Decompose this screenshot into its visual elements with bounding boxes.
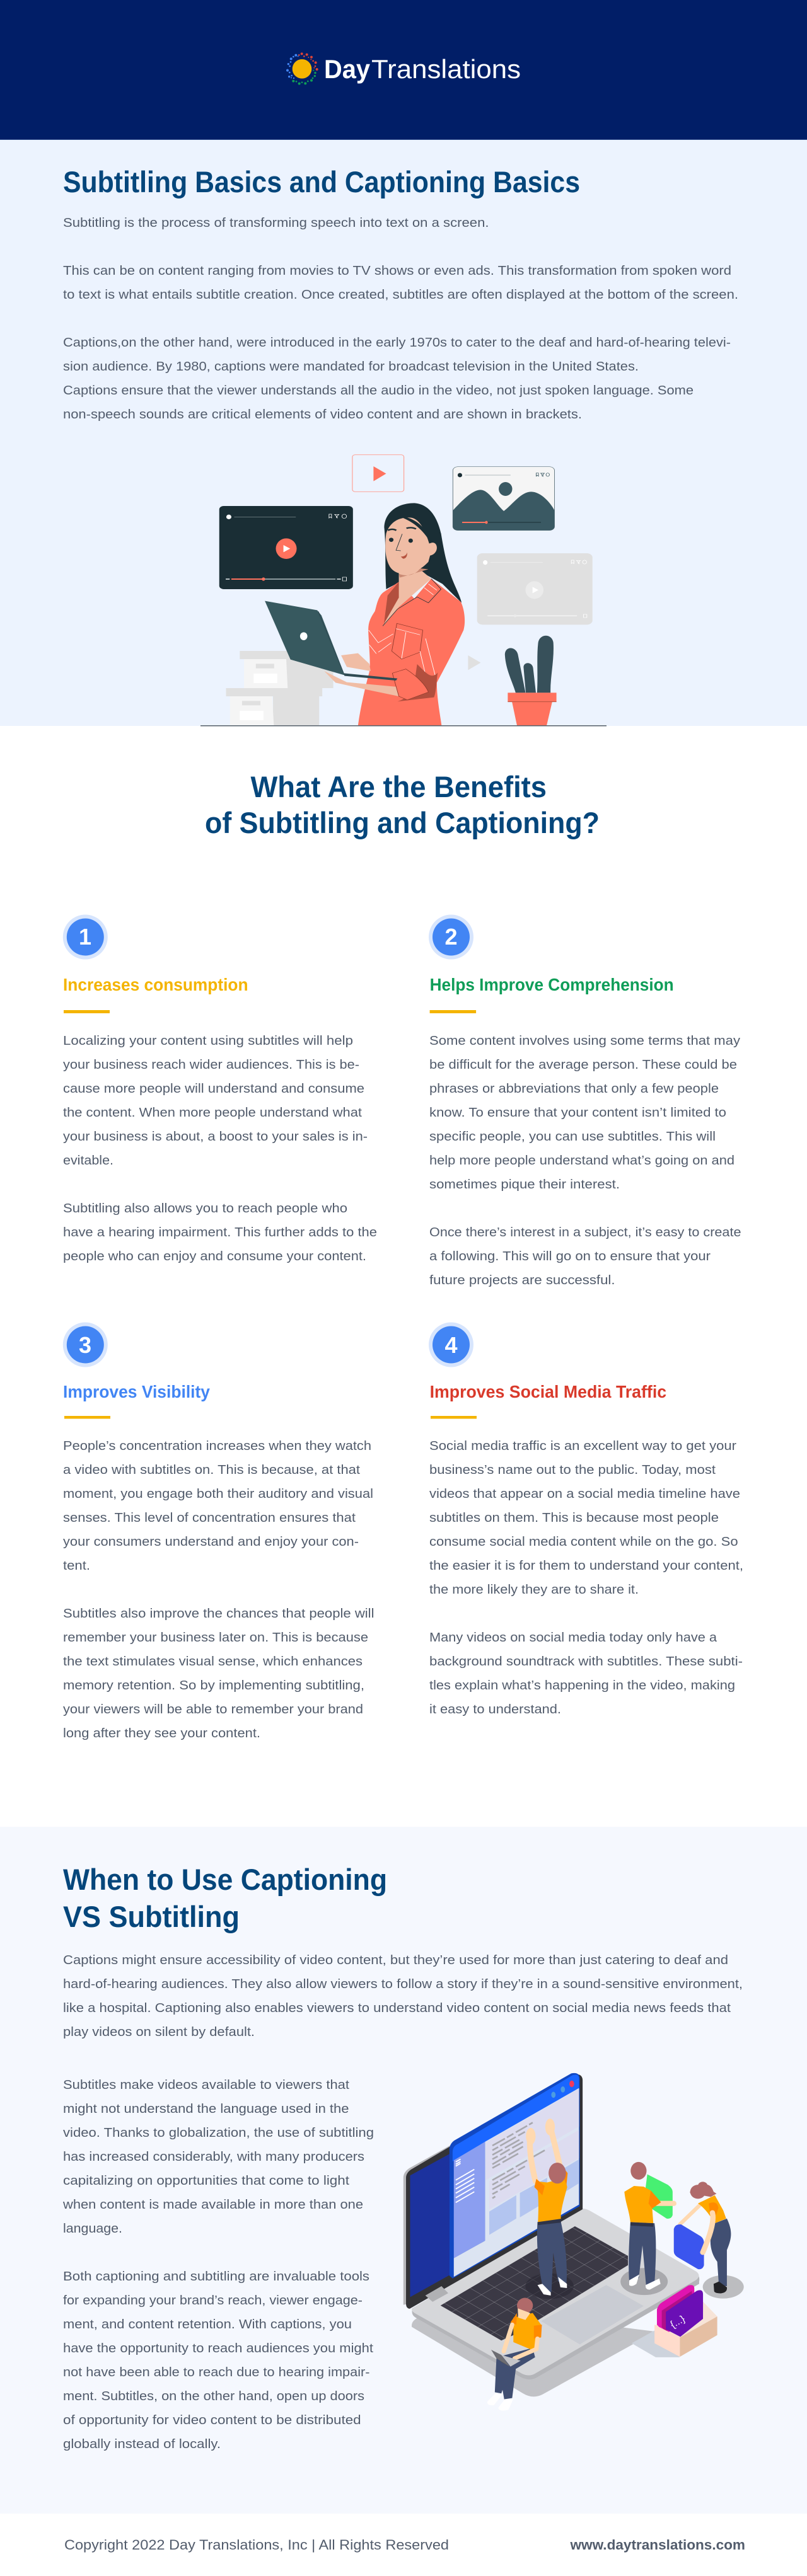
icon: laptop [404, 2073, 699, 2396]
text block: card 1 body: people who can enjoy and consume your content. [63, 1250, 366, 1263]
title: improves visibility: Improves Visibility [63, 1382, 210, 1401]
text block: card 2 body: sometimes pique their interest. [429, 1178, 620, 1192]
text block: card 1 body: the content. When more people understand what [63, 1106, 362, 1120]
text block: card 4 body: background soundtrack with subtitles. These subti- [429, 1655, 743, 1669]
text block: both tools: not have been able to reach due to hearing impair- [63, 2366, 369, 2379]
heading: benefits [205, 770, 600, 839]
figure: person holding green panel [620, 2162, 674, 2295]
text block: card 3 body: remember your business later on. This is because [63, 1631, 368, 1645]
heading: benefits: What Are the Benefits [251, 770, 547, 803]
ground line [200, 725, 607, 726]
figure: seated person with laptop [487, 2298, 542, 2411]
text block: both tools: globally instead of locally. [63, 2437, 221, 2451]
text block: card 4 body: the more likely they are to share it. [429, 1583, 639, 1597]
text block: subtitles availability: when content is made available in more than one [62, 2198, 363, 2212]
text block: basics intro: Subtitling is the process of transforming speech into text on a screen. [63, 216, 489, 230]
text block: card 1 body [63, 1034, 377, 1263]
icon: number 1: 1 [79, 924, 91, 950]
logo: wordmark: Translations [371, 54, 521, 84]
panel: subtitling and captioning basics [0, 140, 807, 726]
text block: card 2 body: know. To ensure that your content isn’t limited to [429, 1106, 726, 1120]
text block: both tools: ment, and content retention. With captions, you [63, 2318, 352, 2332]
icon: number 1 [63, 915, 108, 959]
icon: cactus plant [505, 636, 557, 726]
text block: card 1 body: Localizing your content using subtitles will help [63, 1034, 353, 1048]
card 4: improves social media traffic [429, 1322, 743, 1716]
header band with logo [0, 0, 807, 140]
text block: basics intro: This can be on content ranging from movies to TV shows or even ads. This transformation from spoken word [63, 264, 731, 278]
text block: subtitles availability: video. Thanks to globalization, the use of subtitling [63, 2126, 374, 2140]
text block: card 2 body: specific people, you can use subtitles. This will [429, 1130, 716, 1144]
icon: dark video player [219, 506, 353, 589]
footer [64, 2537, 745, 2553]
text block: captions overview: hard-of-hearing audiences. They also allow viewers to follow a story if they’re in a sound-sensitive environment, [63, 1977, 743, 1991]
card 1: increases consumption [63, 915, 377, 1263]
text block: card 3 body: senses. This level of concentration ensures that [63, 1511, 356, 1525]
text block: captions overview [63, 1953, 743, 2039]
icon: number 4 [429, 1322, 473, 1367]
text block: basics intro: to text is what entails subtitle creation. Once created, subtitles are often displayed at the bottom of the screen. [63, 288, 738, 302]
card 2: helps improve comprehension [429, 915, 741, 1287]
figure: person reaching up on keyboard [525, 2119, 574, 2299]
panel: when to use captioning vs subtitling [0, 1827, 807, 2514]
text block: card 3 body: People’s concentration increases when they watch [63, 1439, 371, 1453]
icon: woman with laptop [265, 503, 465, 726]
icon: number 4: 4 [444, 1332, 458, 1358]
logo: wordmark: Day [324, 54, 371, 84]
text block: captions overview: Captions might ensure accessibility of video content, but they’re used for more than just catering to deaf and [63, 1953, 728, 1967]
logo: sun icon [286, 52, 318, 85]
text block: card 4 body [429, 1439, 743, 1716]
heading: basics: Subtitling Basics and Captioning Basics [63, 165, 580, 198]
text block: card 3 body [63, 1439, 374, 1740]
text block: card 4 body: business’s name out to the public. Today, most [429, 1463, 716, 1477]
text block: both tools: have the opportunity to reach audiences you might [63, 2342, 373, 2355]
text block: basics intro: sion audience. By 1980, captions were mandated for broadcast television in the United States. [63, 360, 639, 374]
text block: subtitles availability: Subtitles make videos available to viewers that [63, 2078, 349, 2092]
icon: faded video player [477, 553, 593, 624]
text block: card 3 body: the text stimulates visual sense, which enhances [63, 1655, 363, 1669]
text block: subtitles availability [62, 2078, 374, 2236]
copyright text: Copyright 2022 Day Translations, Inc | All Rights Reserved [64, 2537, 449, 2553]
text block: card 4 body: Social media traffic is an excellent way to get your [429, 1439, 736, 1453]
text block: captions overview: like a hospital. Captioning also enables viewers to understand video content on social media news feeds that [63, 2001, 731, 2015]
title: increases consumption: Increases consumption [63, 975, 248, 994]
text block: card 4 body: it easy to understand. [429, 1703, 561, 1716]
text block: subtitles availability: might not understand the language used in the [63, 2102, 349, 2116]
text block: card 3 body: your viewers will be able to remember your brand [63, 1703, 363, 1716]
icon: number 2: 2 [444, 924, 458, 950]
text block: card 2 body: Once there’s interest in a subject, it’s easy to create [429, 1226, 741, 1239]
text block: card 3 body: memory retention. So by implementing subtitling, [63, 1679, 364, 1693]
heading: when to use [63, 1863, 387, 1933]
text block: card 1 body: cause more people will understand and consume [63, 1082, 364, 1096]
title: improves social media traffic: Improves Social Media Traffic [430, 1382, 666, 1401]
text block: basics intro [63, 216, 738, 422]
text block: card 2 body: a following. This will go on to ensure that your [429, 1250, 711, 1263]
text block: card 2 body: Some content involves using some terms that may [429, 1034, 740, 1048]
icon: box with code cards [632, 2285, 717, 2357]
icon: small play triangle [468, 655, 481, 670]
text block: captions overview: play videos on silent by default. [63, 2025, 255, 2039]
text block: card 4 body: Many videos on social media today only have a [429, 1631, 717, 1645]
text block: basics intro: Captions,on the other hand, were introduced in the early 1970s to cater to the deaf and hard-of-hearing televi- [63, 336, 731, 350]
text block: card 3 body: a video with subtitles on. This is because, at that [63, 1463, 360, 1477]
card 3: improves visibility [63, 1322, 374, 1740]
text block: card 1 body: Subtitling also allows you to reach people who [63, 1202, 347, 1216]
text block: basics intro: non-speech sounds are critical elements of video content and are shown in brackets. [63, 408, 582, 422]
figure: woman holding blue panel [674, 2182, 744, 2299]
text block: card 1 body: have a hearing impairment. This further adds to the [63, 1226, 377, 1239]
heading: benefits: of Subtitling and Captioning? [205, 806, 600, 839]
heading: when to use: VS Subtitling [63, 1900, 240, 1933]
text block: card 3 body: moment, you engage both their auditory and visual [63, 1487, 373, 1501]
text block: card 2 body: be difficult for the average person. These could be [429, 1058, 737, 1072]
text block: card 1 body: evitable. [63, 1154, 113, 1168]
icon: box with code cards: {...} [668, 2314, 687, 2330]
text block: card 2 body: help more people understand what’s going on and [429, 1154, 734, 1168]
icon: number 3: 3 [79, 1332, 91, 1358]
text block: card 3 body: long after they see your content. [63, 1727, 260, 1740]
text block: card 1 body: your business is about, a boost to your sales is in- [63, 1130, 368, 1144]
text block: both tools [63, 2270, 373, 2451]
text block: card 2 body: phrases or abbreviations that only a few people [429, 1082, 719, 1096]
title: helps improve comprehension: Helps Improve Comprehension [430, 975, 674, 994]
text block: card 3 body: Subtitles also improve the chances that people will [63, 1607, 374, 1621]
text block: both tools: ment. Subtitles, on the other hand, open up doors [63, 2389, 364, 2403]
text block: card 4 body: tles explain what’s happening in the video, making [429, 1679, 735, 1693]
text block: subtitles availability: capitalizing on opportunities that come to light [63, 2174, 349, 2188]
text block: card 4 body: videos that appear on a social media timeline have [429, 1487, 740, 1501]
text block: both tools: of opportunity for video content to be distributed [63, 2413, 361, 2427]
panel: benefits [63, 770, 743, 1740]
text block: both tools: Both captioning and subtitling are invaluable tools [63, 2270, 369, 2284]
text block: card 1 body: your business reach wider audiences. This is be- [63, 1058, 359, 1072]
icon: play button frame [352, 455, 404, 492]
text block: card 4 body: subtitles on them. This is because most people [429, 1511, 719, 1525]
icon: number 3 [63, 1322, 108, 1367]
heading: when to use: When to Use Captioning [63, 1863, 387, 1896]
text block: subtitles availability: language. [63, 2222, 122, 2236]
website url: www.daytranslations.com [569, 2537, 745, 2553]
text block: card 4 body: the easier it is for them to understand your content, [429, 1559, 743, 1573]
text block: card 2 body [429, 1034, 741, 1287]
icon: storage boxes [226, 651, 334, 726]
illustration: woman with laptop and video players [219, 455, 593, 726]
text block: both tools: for expanding your brand’s reach, viewer engage- [63, 2294, 363, 2308]
text block: card 3 body: your consumers understand and enjoy your con- [63, 1535, 359, 1549]
icon: image player [453, 467, 554, 531]
text block: card 3 body: tent. [63, 1559, 90, 1573]
text block: subtitles availability: has increased considerably, with many producers [63, 2150, 364, 2164]
icon: number 2 [429, 915, 473, 959]
text block: card 4 body: consume social media content while on the go. So [429, 1535, 738, 1549]
text block: card 2 body: future projects are successful. [429, 1274, 615, 1287]
text block: basics intro: Captions ensure that the viewer understands all the audio in the video, not just spoken language. Some [63, 384, 694, 398]
illustration: isometric laptop with people [404, 2073, 744, 2411]
